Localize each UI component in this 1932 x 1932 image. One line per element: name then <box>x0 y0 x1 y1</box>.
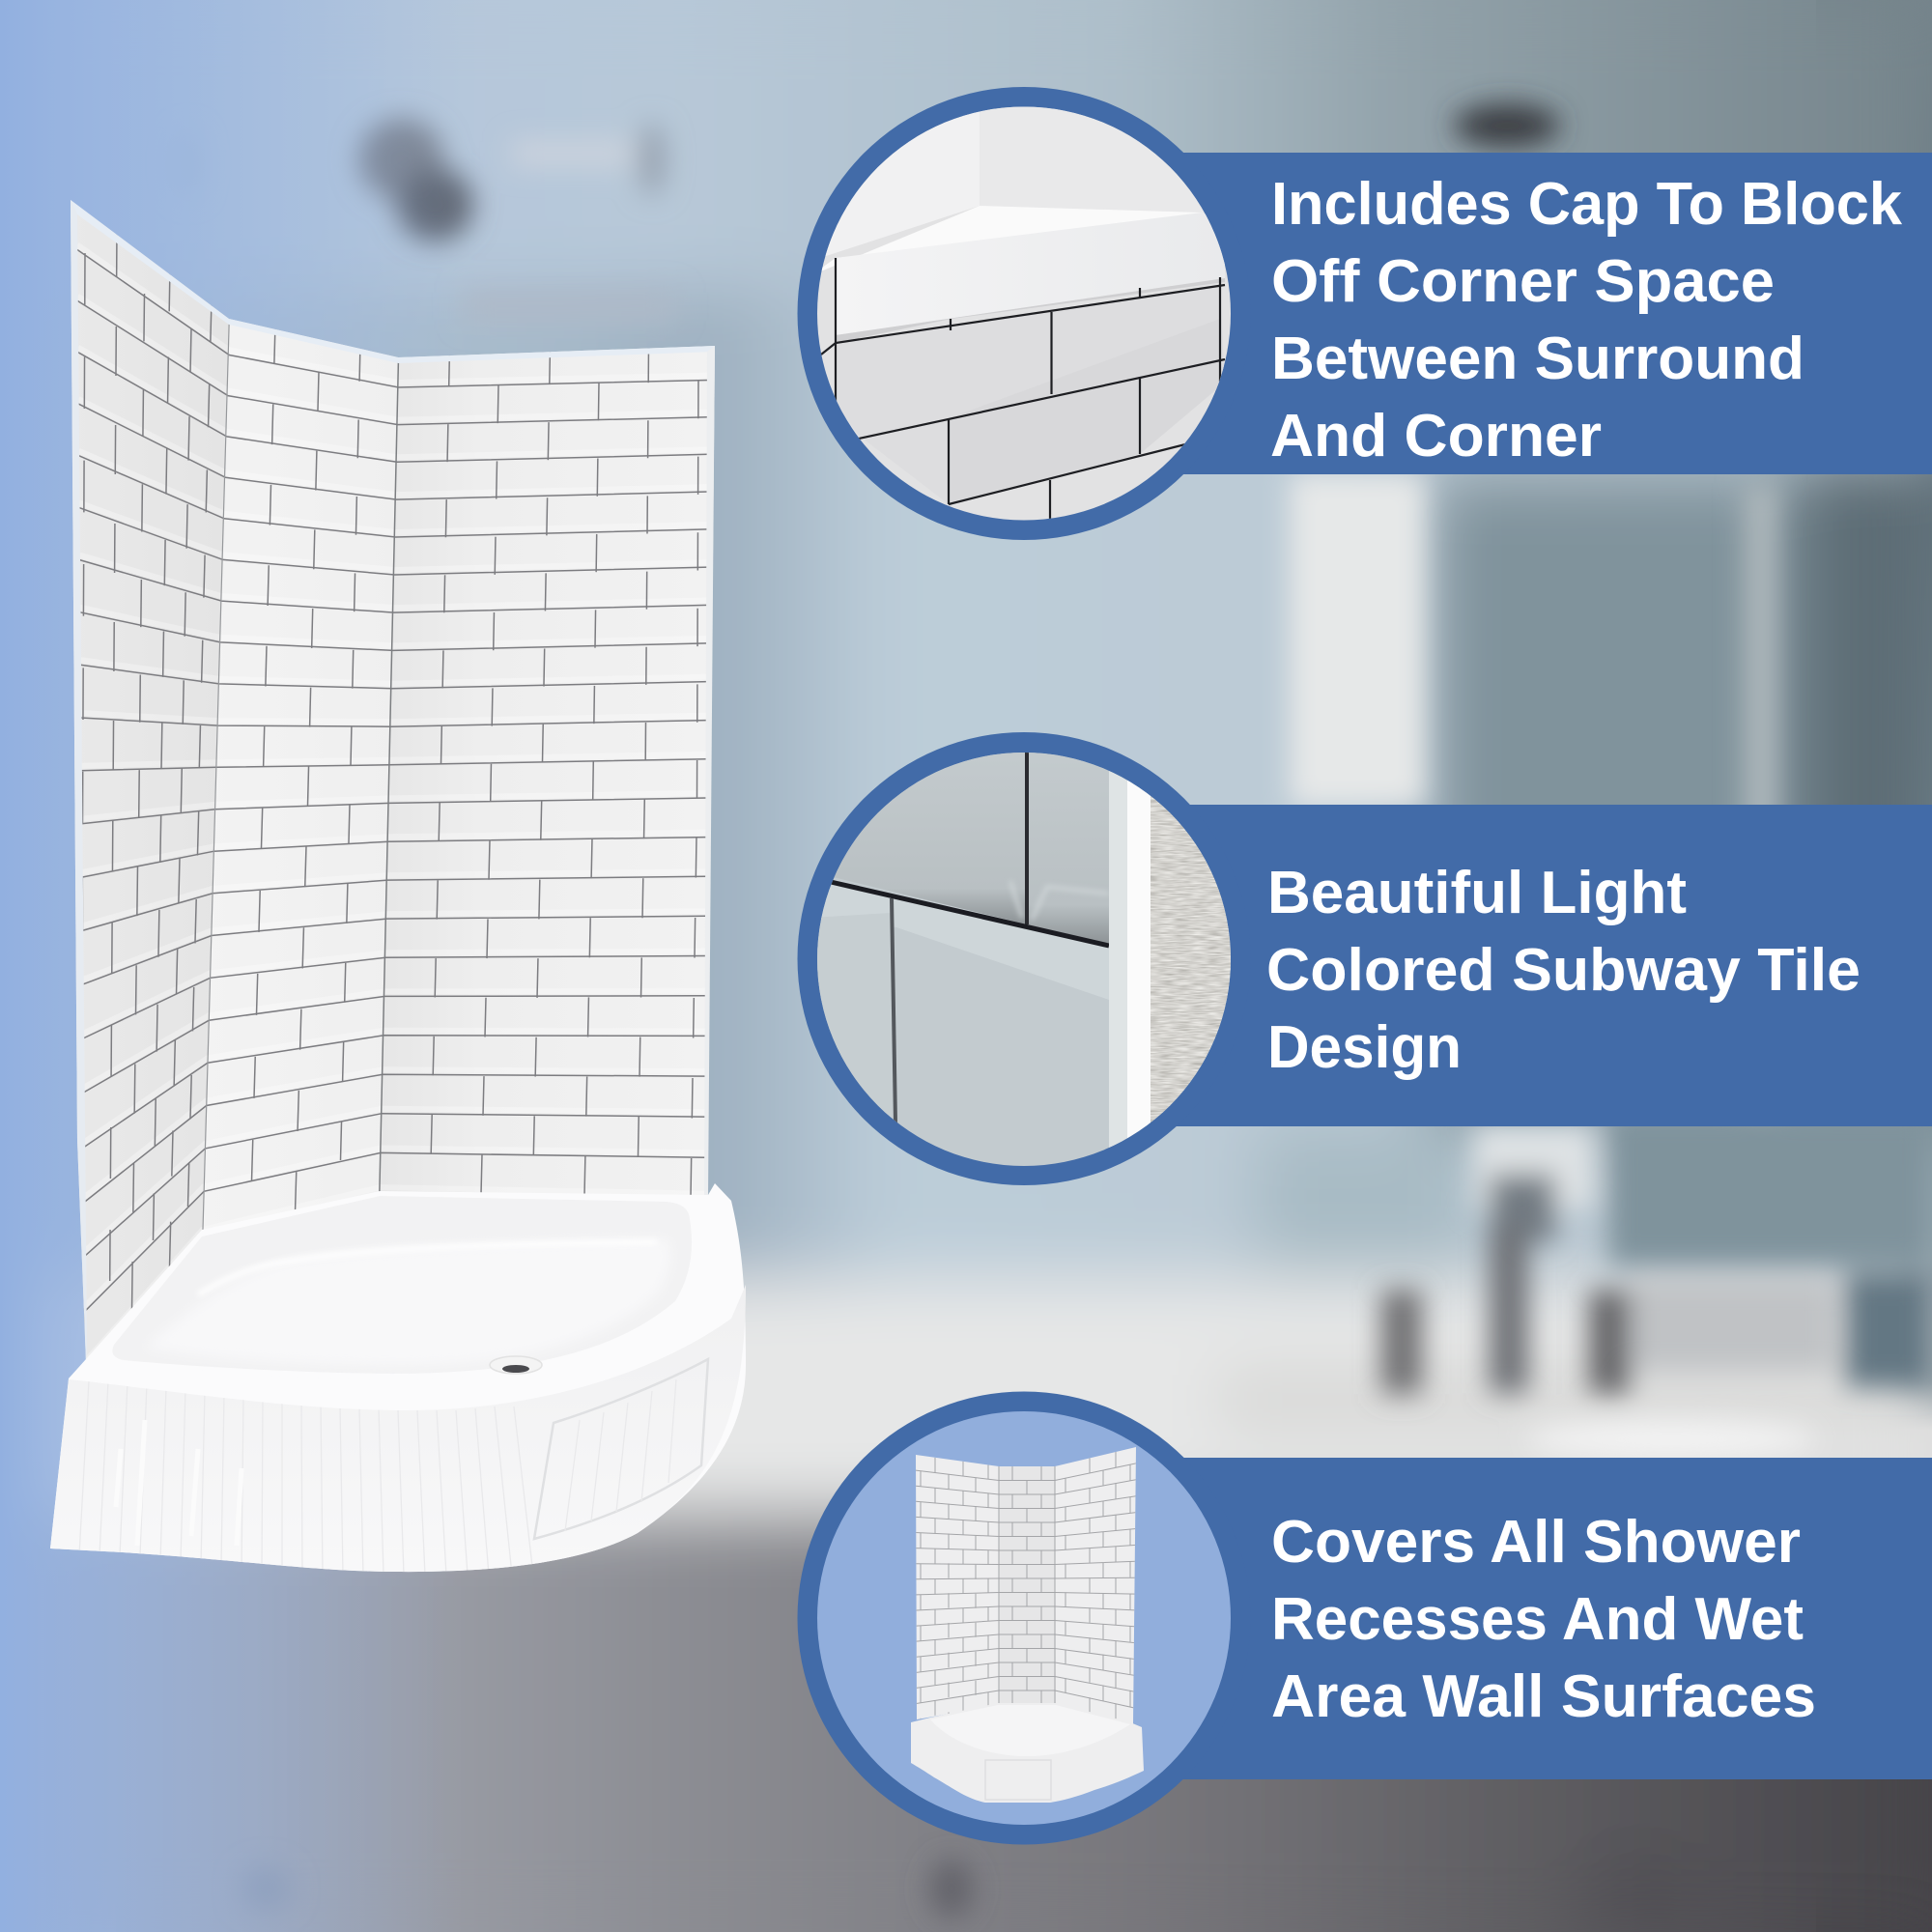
caption 2 <box>1266 860 1861 1081</box>
circle photo: corner cap close-up <box>811 97 1236 526</box>
feature row 3: wall coverage <box>798 1391 1932 1845</box>
caption 2: Design <box>1267 1014 1462 1081</box>
left blue gradient overlay <box>0 0 464 1932</box>
caption 1: Off Corner Space <box>1271 248 1775 315</box>
blue ribbon and ring <box>798 87 1932 540</box>
shower surround product <box>50 200 746 1575</box>
caption 1 <box>1270 171 1903 469</box>
mini walls <box>916 1447 1136 1729</box>
mini base <box>911 1703 1144 1803</box>
caption 3: Area Wall Surfaces <box>1271 1663 1816 1730</box>
caption 3 <box>1271 1509 1816 1730</box>
caption 1: Includes Cap To Block <box>1271 171 1903 238</box>
tray basin <box>112 1196 692 1374</box>
blue ribbon and ring <box>798 732 1932 1185</box>
feature row 2: subway tile design <box>798 732 1932 1185</box>
caption 3: Recesses And Wet <box>1271 1586 1804 1653</box>
feature row 1: corner cap <box>798 87 1932 540</box>
mini shower product <box>911 1447 1144 1803</box>
caption 2: Beautiful Light <box>1267 860 1687 926</box>
shower base tray <box>50 1183 746 1575</box>
tiled wall panels <box>71 200 715 1366</box>
caption 3: Covers All Shower <box>1271 1509 1801 1576</box>
caption 1: And Corner <box>1270 403 1602 469</box>
tray drain <box>490 1356 542 1374</box>
tray skirt with embossed tiles <box>50 1285 746 1575</box>
caption 1: Between Surround <box>1271 326 1804 392</box>
caption 2: Colored Subway Tile <box>1266 937 1861 1004</box>
blue ribbon and ring <box>798 1391 1932 1845</box>
circle photo: tile close-up <box>811 744 1237 1179</box>
